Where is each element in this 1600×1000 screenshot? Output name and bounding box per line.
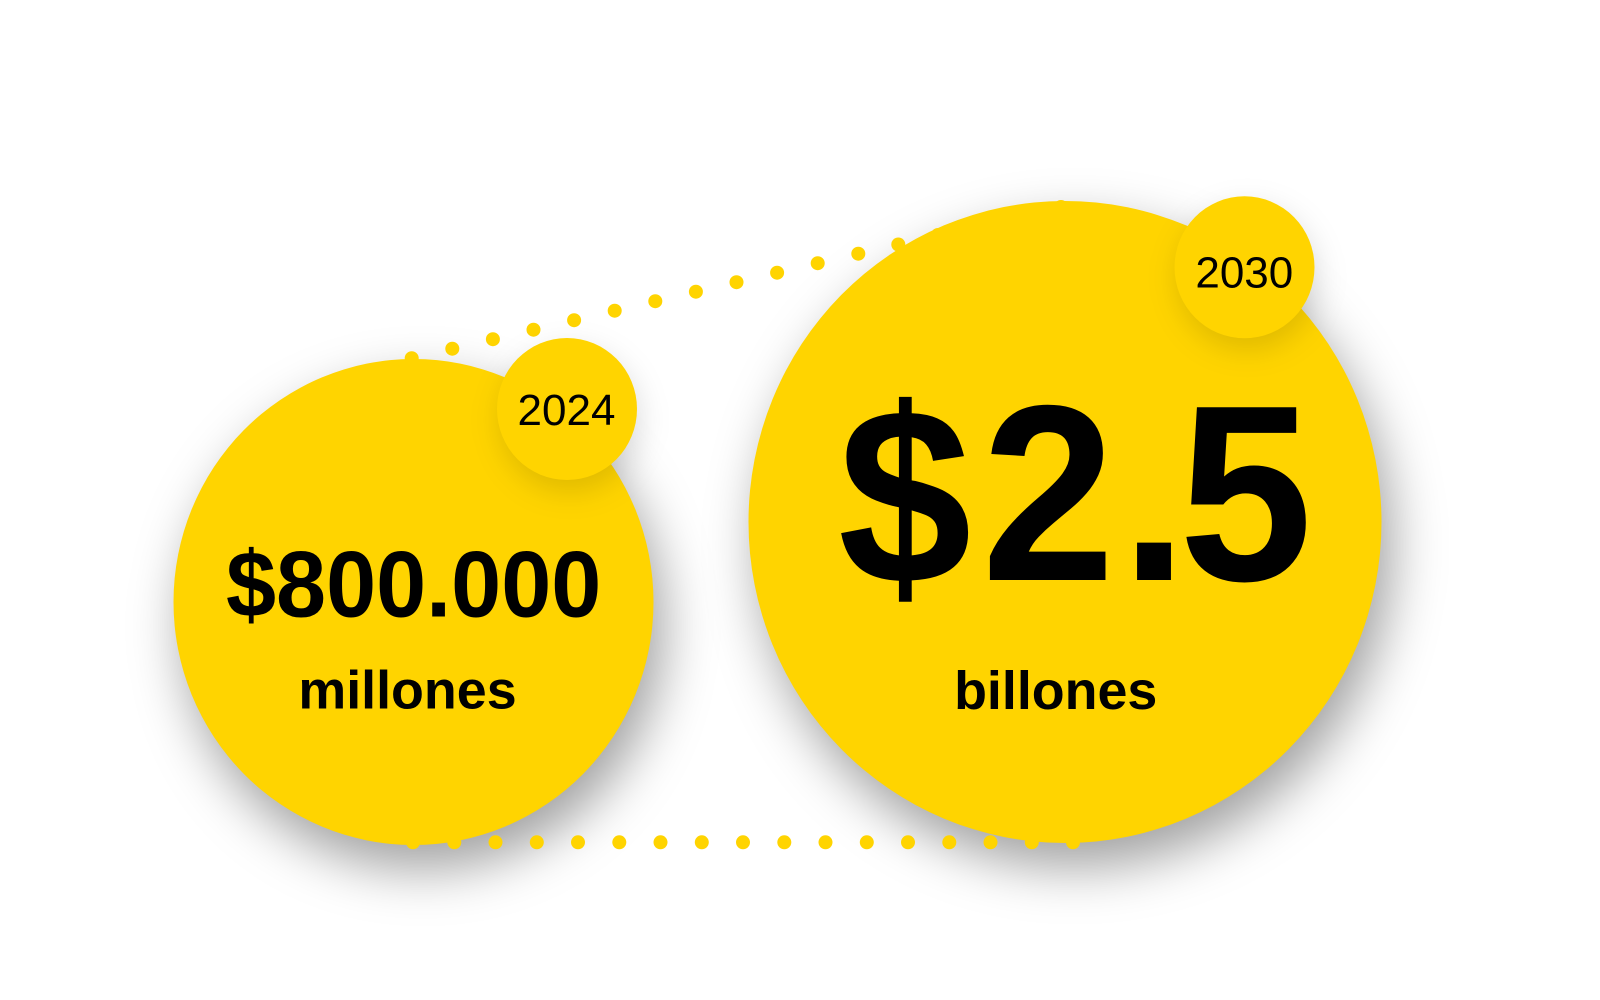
badge: 2030: 2030: [1195, 248, 1293, 298]
badge: 2024: 2024: [518, 386, 615, 435]
badge: 2030: [1174, 196, 1318, 349]
panel: 2030 circle: [748, 201, 1382, 843]
badge: 2024: [497, 338, 640, 491]
amount 2030: 2.5: [982, 354, 1312, 634]
amount 2024: $800.000: [226, 533, 601, 637]
amount 2030: $: [838, 357, 971, 637]
dotted connector: top: [405, 200, 1068, 365]
unit: millones: millones: [298, 660, 517, 720]
dotted connector: bottom: [406, 835, 1080, 849]
panel: 2024 circle: [174, 359, 654, 845]
unit: billones: billones: [954, 661, 1157, 721]
